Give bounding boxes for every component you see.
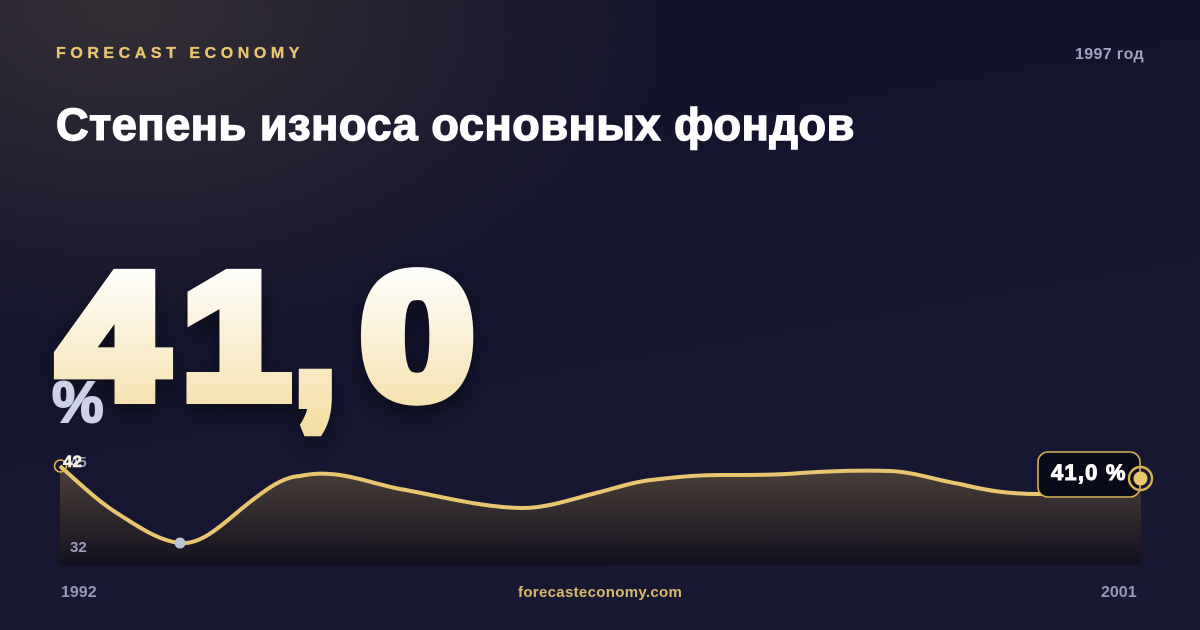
title: Степень износа основных фондов: [56, 99, 855, 150]
axis end year: 2001: [1101, 584, 1137, 601]
start marker: [54, 460, 66, 472]
axis min label: 32: [70, 539, 87, 556]
axis max label: 45: [70, 454, 87, 471]
big number: 0: [361, 238, 474, 435]
big number: [59, 238, 474, 440]
year label: 1997 год: [1075, 46, 1144, 63]
big number: 1: [182, 239, 290, 435]
trend line: [60, 466, 1141, 543]
axis start year: 1992: [61, 584, 97, 601]
big number: 4: [59, 239, 166, 435]
end marker: [1129, 467, 1152, 490]
low marker: [174, 538, 186, 548]
value callout: 41,0 %: [1051, 460, 1127, 485]
area under curve: [60, 466, 1141, 565]
big number: ,: [294, 243, 336, 440]
value callout: [1038, 452, 1140, 497]
brand label: FORECAST ECONOMY: [56, 45, 304, 62]
source url: forecasteconomy.com: [518, 584, 682, 601]
unit percent: %: [52, 370, 104, 435]
start value label: 42: [63, 452, 82, 471]
